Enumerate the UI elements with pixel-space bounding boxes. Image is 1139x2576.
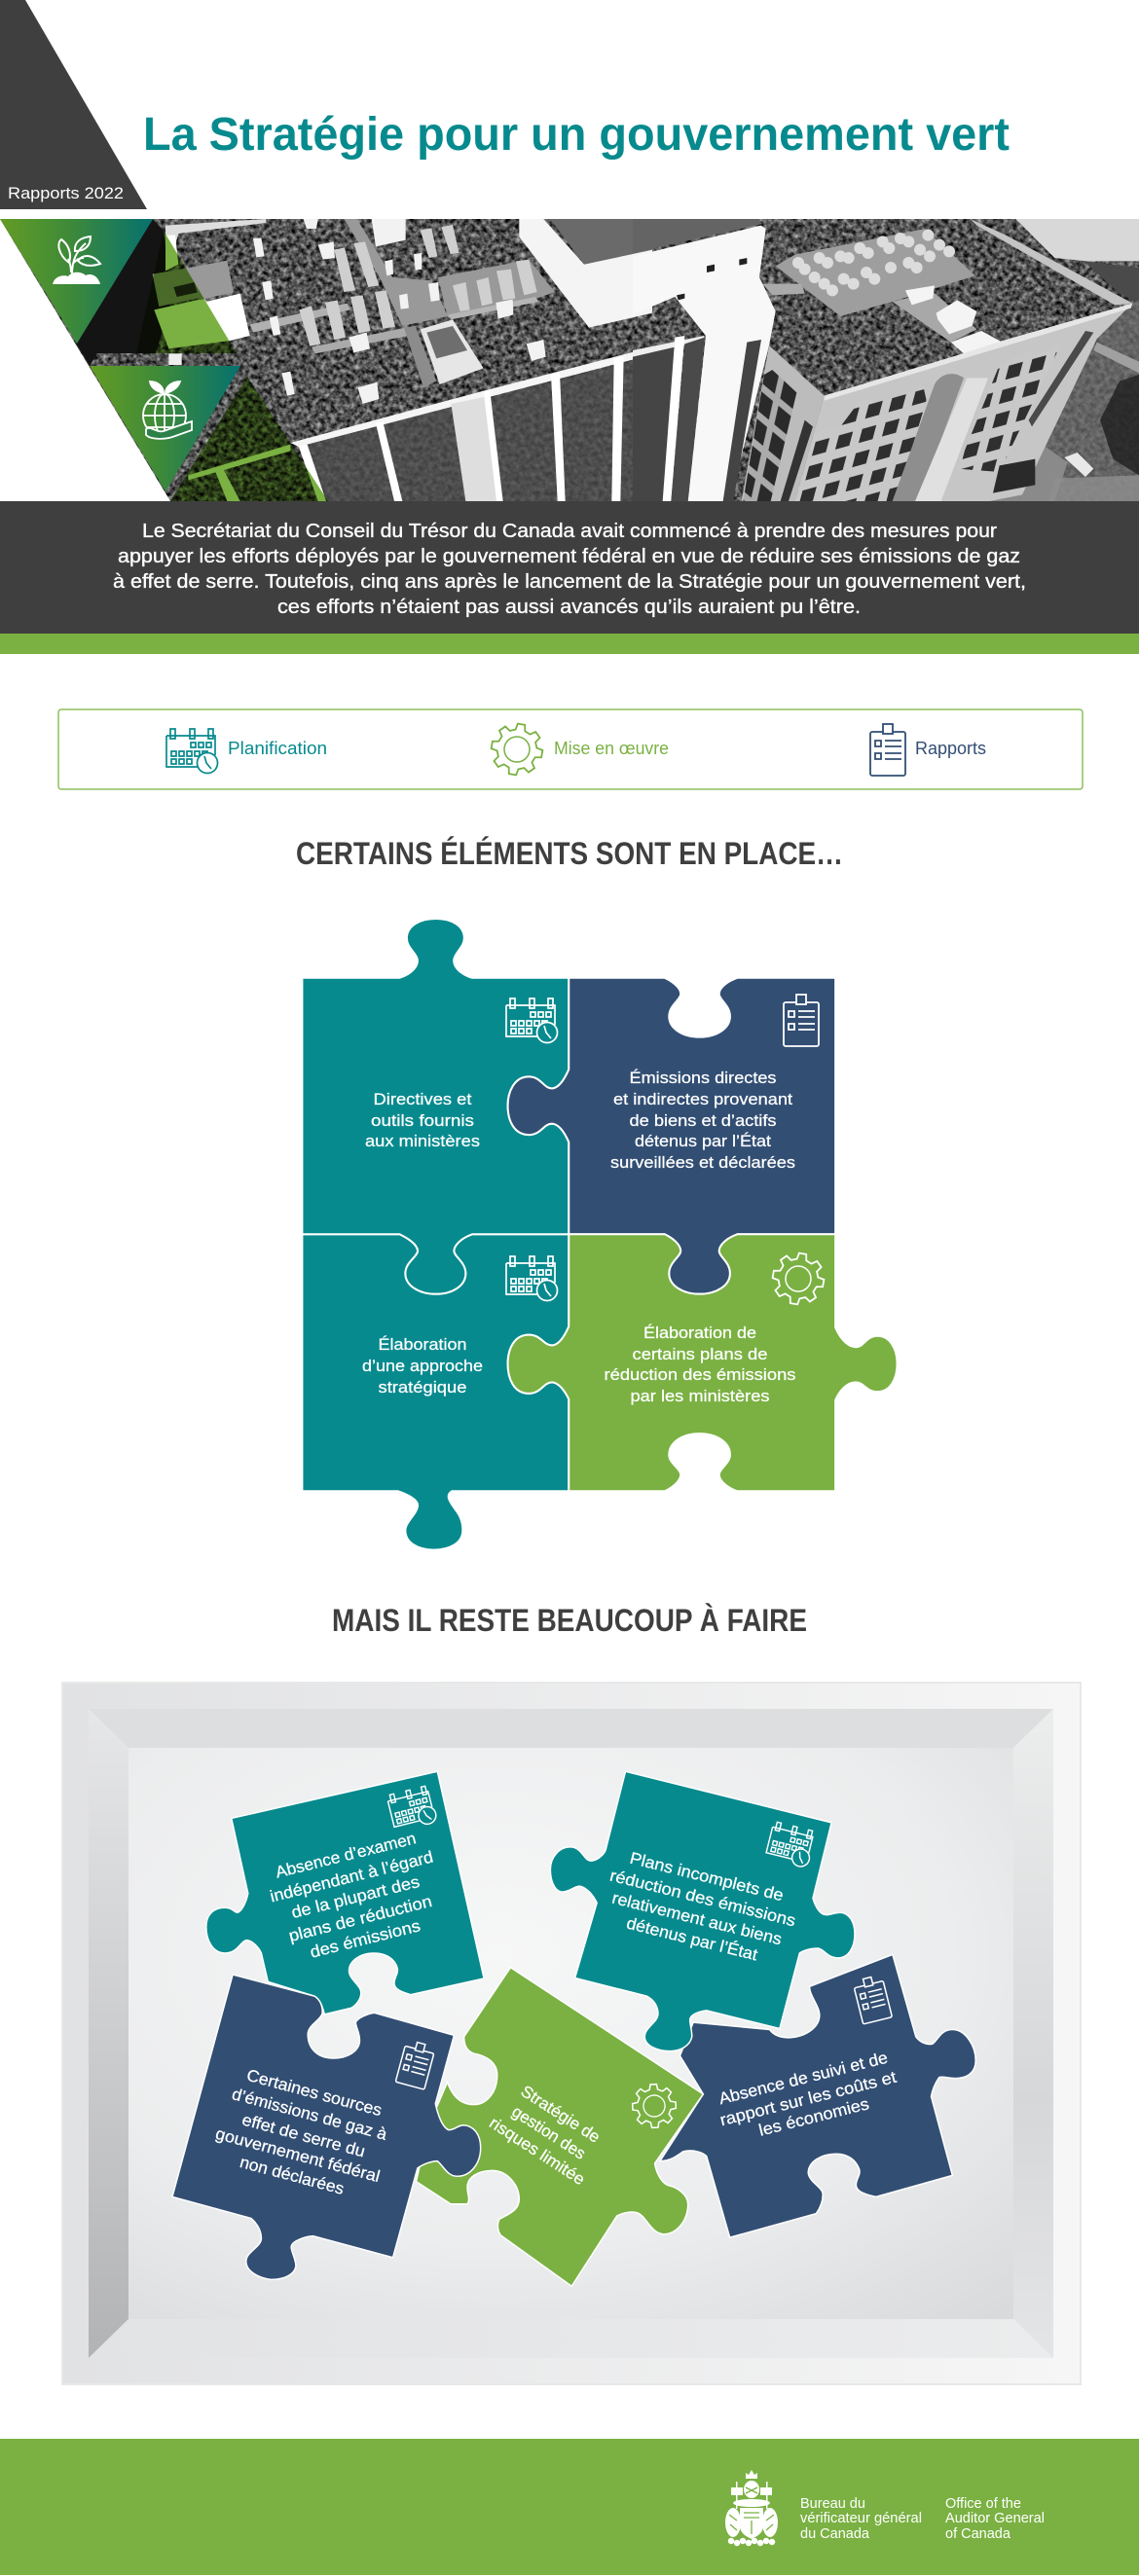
puzzle piece: teal right [550,1771,855,2051]
text: emissions [610,1069,795,1172]
text: no independent review: de la plupart des [289,1872,422,1922]
text: strategic approach: d’une approche [362,1357,483,1375]
text: no tracking: rapport sur les coûts et [718,2068,899,2129]
puzzle piece: top left teal [302,919,569,1294]
intro text: à effet de serre. Toutefois, cinq ans après le lancement de la Stratégie pour un gouvernement vert, [113,571,1026,593]
puzzle piece: navy right [660,1954,975,2237]
heading: elements in place: CERTAINS ÉLÉMENTS SONT EN PLACE… [296,836,843,871]
puzzle piece: teal left [206,1771,484,2014]
puzzle piece: navy left [172,1975,481,2279]
text: emissions: détenus par l’État [635,1132,771,1150]
legend panel [58,709,1083,789]
text: unreported emissions: non déclarées [238,2153,346,2198]
text: incomplete plans: relativement aux biens [610,1889,784,1948]
shadow box panel [62,1683,1081,2384]
footer text: French name: du Canada [800,2526,870,2542]
text: no independent review: des émissions [309,1916,423,1962]
text: no independent review [268,1829,435,1962]
icon: clipboard [870,724,905,776]
icon: calendar on teal left piece [386,1785,438,1832]
icon: calendar on bottom left piece [506,1256,557,1300]
icon: clipboard on top right piece [784,995,819,1046]
text: emissions: de biens et d’actifs [629,1111,777,1130]
text: emissions: et indirectes provenant [613,1090,792,1108]
green tint triangles [136,231,328,501]
text: unreported emissions [213,2066,389,2198]
text: unreported emissions: effet de serre du [240,2110,367,2160]
title: La Stratégie pour un gouvernement vert [143,109,1010,161]
icon: gear on bottom right piece [769,1250,827,1308]
puzzle piece: top right navy [508,978,835,1294]
green triangle with plant icon [0,219,153,344]
text: directives: Directives et [374,1090,472,1108]
green strip [0,634,1139,654]
legend: planning: Planification [228,739,327,758]
icon: plant [53,236,100,284]
text: incomplete plans: détenus par l’État [625,1914,759,1964]
legend: implementation: Mise en œuvre [554,739,669,758]
text: strategic approach: Élaboration [378,1335,467,1354]
text: incomplete plans [607,1849,797,1964]
intro text: Le Secrétariat du Conseil du Trésor du Canada avait commencé à prendre des mesures pour [142,521,997,542]
puzzle piece: bottom left teal [302,1234,569,1550]
logo: coat of arms [725,2470,778,2543]
text: reduction plans [604,1324,796,1405]
text: incomplete plans: réduction des émissions [607,1867,797,1930]
footer band [0,2439,1139,2575]
text: no tracking [716,2049,899,2140]
icon: globe in hand [143,381,192,439]
text: reduction plans: par les ministères [631,1387,769,1405]
footer text: English name: of Canada [945,2526,1011,2542]
text: unreported emissions: Certaines sources [244,2066,384,2120]
text: directives [365,1090,480,1150]
hero photo of green-roof building [0,219,1139,501]
scattered puzzle pieces [172,1771,975,2286]
text: no independent review: plans de réduction [287,1892,434,1945]
text: incomplete plans: Plans incomplets de [628,1849,786,1905]
icon: calendar on top left piece [506,998,557,1043]
text: limited risk strategy [486,2082,604,2189]
text: limited risk strategy: gestion des [508,2102,589,2163]
puzzle piece: bottom right green [508,1234,898,1491]
legend: reports: Rapports [915,739,986,758]
footer text: English name [945,2496,1045,2542]
puzzle piece: green centre [416,1968,703,2286]
text: strategic approach: stratégique [378,1378,467,1397]
right half of building [633,219,1139,501]
text: no tracking: les économies [757,2094,871,2140]
header report tab [0,0,147,209]
icon: clipboard on navy right piece [853,1975,892,2024]
text: limited risk strategy: risques limitée [486,2114,588,2189]
assembled puzzle [302,919,898,1550]
left half of building [153,219,652,501]
footer text: English name: Office of the [945,2496,1021,2512]
text: no independent review: indépendant à l’égard [268,1847,435,1906]
intro band [0,501,1139,634]
icon: clipboard on navy left piece [395,2040,435,2089]
text: directives: outils fournis [371,1111,474,1130]
text: reduction plans: réduction des émissions [604,1365,796,1384]
text: no independent review: Absence d’examen [274,1829,418,1882]
icon: calendar [166,729,218,773]
intro text: ces efforts n’étaient pas aussi avancés qu’ils auraient pu l’être. [277,597,861,618]
green triangle with globe icon [90,366,240,491]
footer text: English name: Auditor General [945,2511,1045,2526]
icon: calendar on teal right piece [765,1822,816,1869]
text: no tracking: Absence de suivi et de [716,2049,890,2108]
intro text: appuyer les efforts déployés par le gouvernement fédéral en vue de réduire ses émissions de gaz [118,546,1020,567]
text: unreported emissions: d’émissions de gaz à [230,2085,389,2144]
text: strategic approach [362,1335,483,1397]
intro text [113,521,1026,618]
footer text: French name [800,2496,922,2542]
text: limited risk strategy: Stratégie de [518,2082,604,2147]
icon: gear [488,720,546,779]
footer text: French name: Bureau du [800,2496,865,2512]
text: emissions: Émissions directes [629,1069,777,1087]
icon: gear on green piece [619,2071,689,2141]
text: reduction plans: certains plans de [633,1345,767,1363]
footer text: French name: vérificateur général [800,2511,922,2526]
text: reduction plans: Élaboration de [643,1324,756,1342]
text: directives: aux ministères [365,1132,480,1150]
text: emissions: surveillées et déclarées [610,1153,795,1172]
heading: much left to do: MAIS IL RESTE BEAUCOUP À FAIRE [332,1603,807,1638]
report label: Rapports 2022 [8,184,124,202]
text: unreported emissions: gouvernement fédéral [213,2124,382,2186]
